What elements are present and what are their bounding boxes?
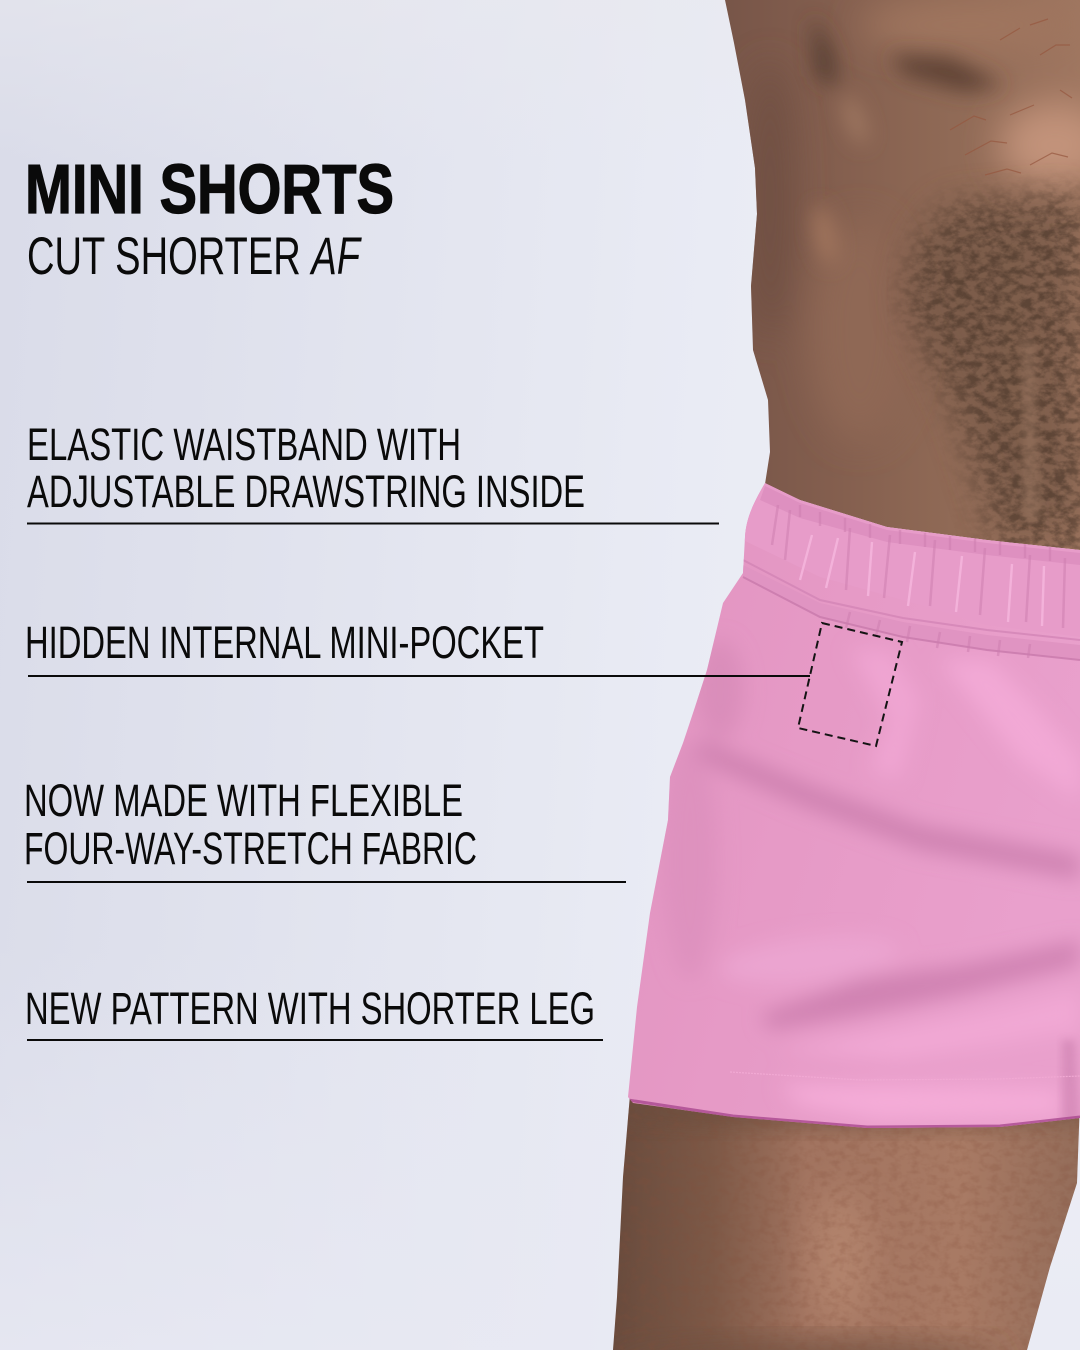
waistband gathers — [800, 535, 1044, 626]
callout: four-way stretch fabric — [24, 775, 626, 883]
callout: four-way stretch fabric: NOW MADE WITH FLEXIBLE — [24, 775, 463, 826]
callout: four-way stretch fabric: FOUR-WAY-STRETCH FABRIC — [24, 823, 477, 874]
callout: shorter leg pattern: NEW PATTERN WITH SHORTER LEG — [25, 983, 595, 1034]
chest and abdomen hair — [905, 19, 1080, 560]
callout: elastic waistband: ADJUSTABLE DRAWSTRING INSIDE — [27, 466, 585, 517]
callout: hidden mini-pocket: HIDDEN INTERNAL MINI-POCKET — [25, 617, 544, 668]
fabric folds — [662, 640, 1080, 1120]
hem edge and stitching — [628, 1100, 1080, 1127]
waistband — [744, 483, 1076, 550]
photo: model thigh — [590, 1090, 1080, 1350]
callout: elastic waistband: ELASTIC WAISTBAND WITH — [27, 419, 461, 470]
callout: elastic waistband — [27, 419, 719, 524]
callout: hidden mini-pocket — [25, 617, 902, 746]
title: MINI SHORTS — [25, 150, 394, 228]
subtitle: CUT SHORTER AF — [27, 227, 362, 286]
pocket dashed outline — [798, 623, 902, 746]
photo: model torso — [720, 0, 1080, 560]
photo: pink mini shorts — [620, 480, 1080, 1140]
